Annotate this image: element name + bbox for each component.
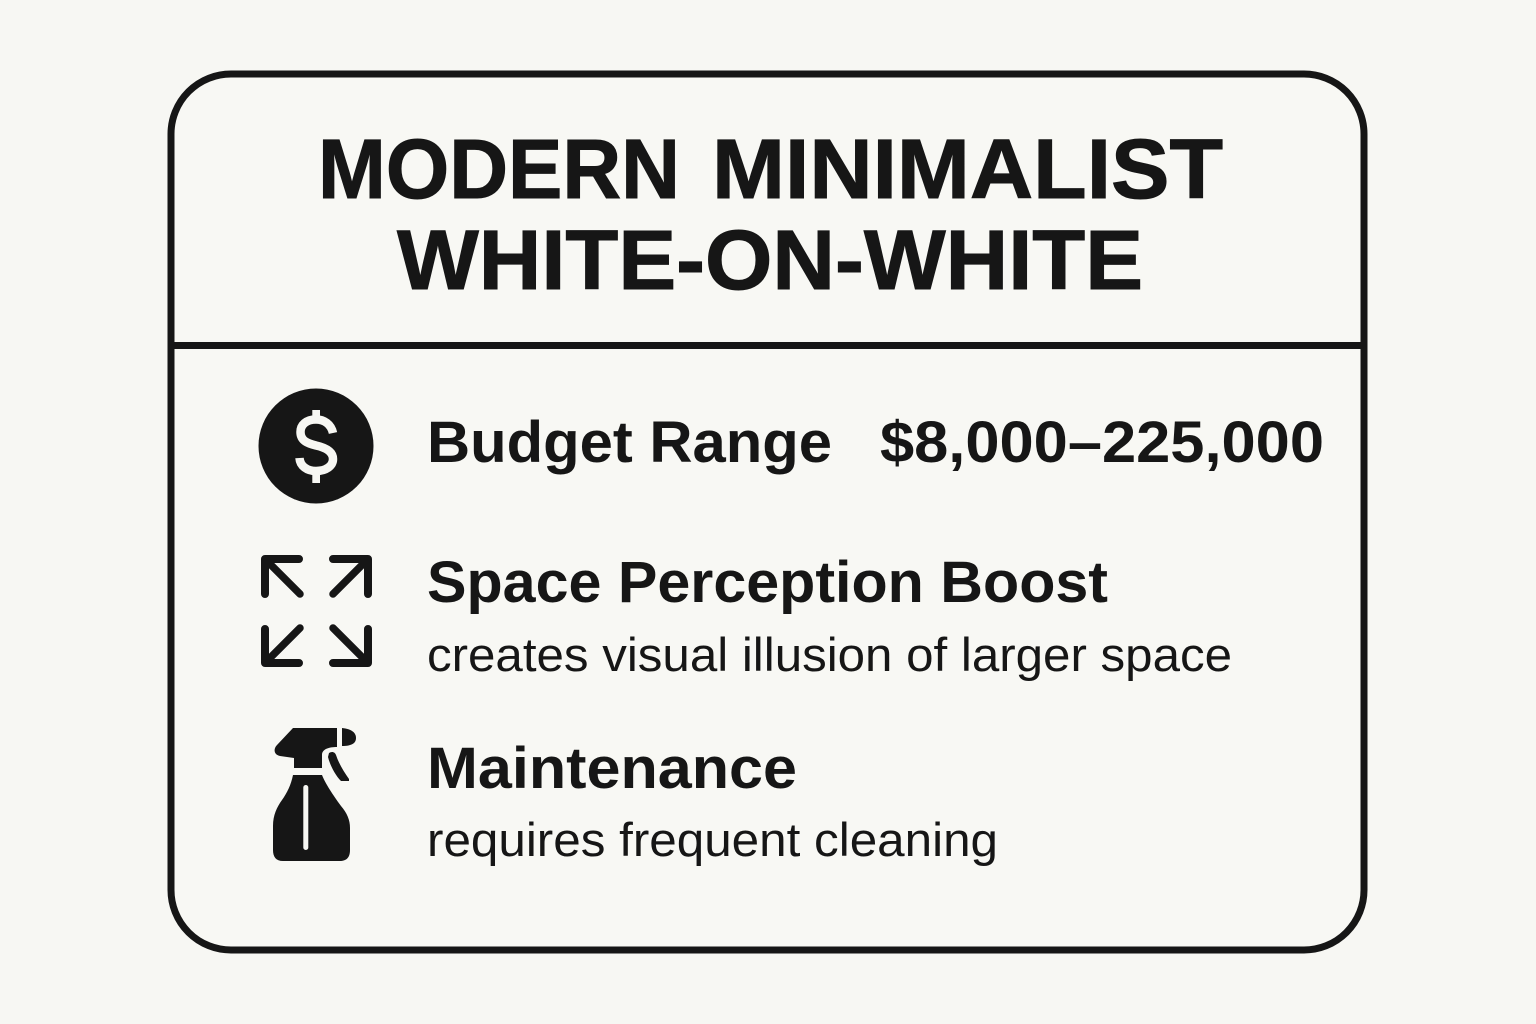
heading: maintenance: Maintenance xyxy=(427,736,797,801)
text: maintenance description: requires frequent cleaning xyxy=(427,813,998,866)
heading: space perception boost: Space Perception Boost xyxy=(427,550,1108,615)
icon: expand arrows xyxy=(265,559,368,663)
title: MODERN xyxy=(318,122,680,216)
icon: dollar coin xyxy=(258,388,374,504)
text: space perception description: creates visual illusion of larger space xyxy=(427,628,1232,681)
title: WHITE-ON-WHITE xyxy=(397,213,1143,307)
value: budget amount: $8,000–225,000 xyxy=(880,410,1324,475)
label: budget range: Budget Range xyxy=(427,410,832,475)
title xyxy=(318,122,1223,307)
panel: main card xyxy=(171,74,1364,950)
icon: spray bottle xyxy=(273,728,356,861)
title: MINIMALIST xyxy=(712,122,1223,216)
